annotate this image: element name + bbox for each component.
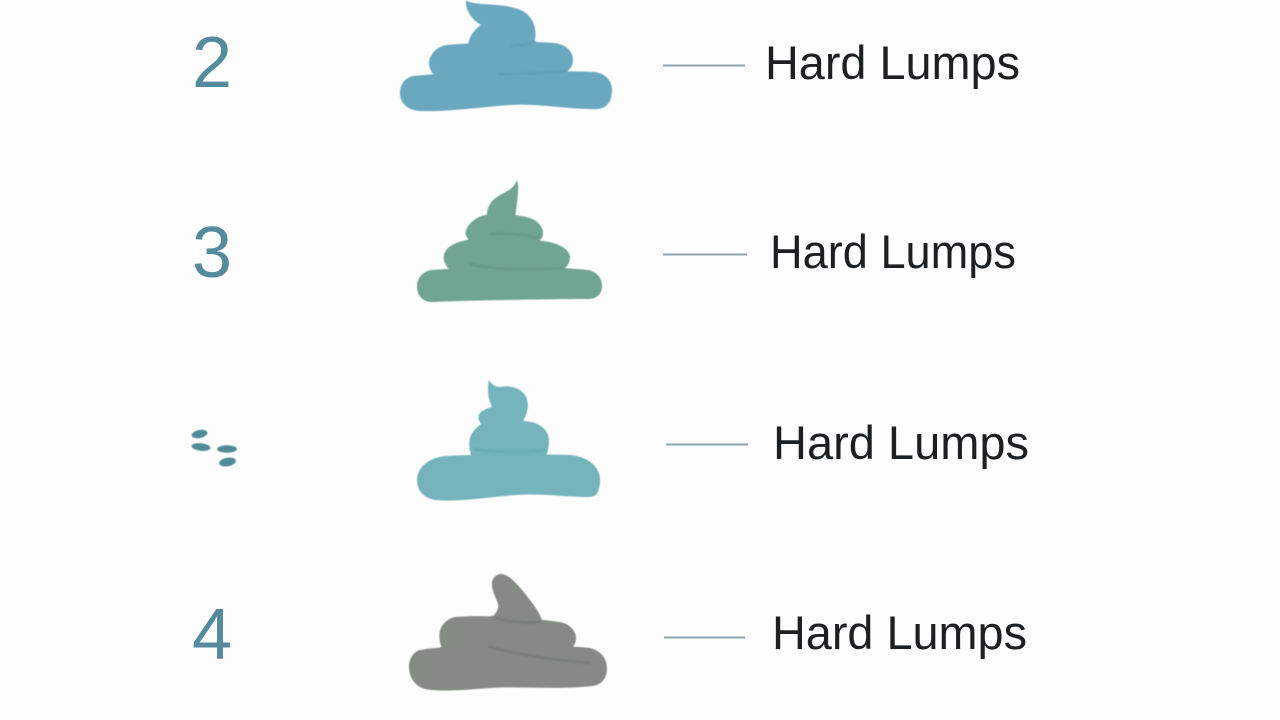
connector line bbox=[663, 64, 745, 66]
row: hard lumps with pellets bbox=[191, 380, 1029, 500]
number 3: 3 bbox=[192, 213, 232, 293]
label: Hard Lumps bbox=[765, 36, 1020, 89]
icon: pellets marker bbox=[191, 429, 237, 468]
row 4: hard lumps bbox=[192, 574, 1027, 691]
number 2: 2 bbox=[192, 23, 232, 103]
connector line bbox=[666, 444, 748, 446]
icon: green stool bbox=[417, 180, 602, 302]
icon: grey stool bbox=[409, 574, 607, 691]
connector line bbox=[663, 254, 747, 256]
row 2: hard lumps bbox=[192, 0, 1020, 111]
number 4: 4 bbox=[192, 595, 232, 675]
label: Hard Lumps bbox=[770, 225, 1016, 278]
icon: blue stool bbox=[400, 0, 612, 111]
label: Hard Lumps bbox=[772, 606, 1027, 659]
label: Hard Lumps bbox=[773, 416, 1029, 469]
icon: teal stool bbox=[417, 380, 600, 500]
connector line bbox=[664, 636, 745, 638]
row 3: hard lumps bbox=[192, 180, 1016, 302]
